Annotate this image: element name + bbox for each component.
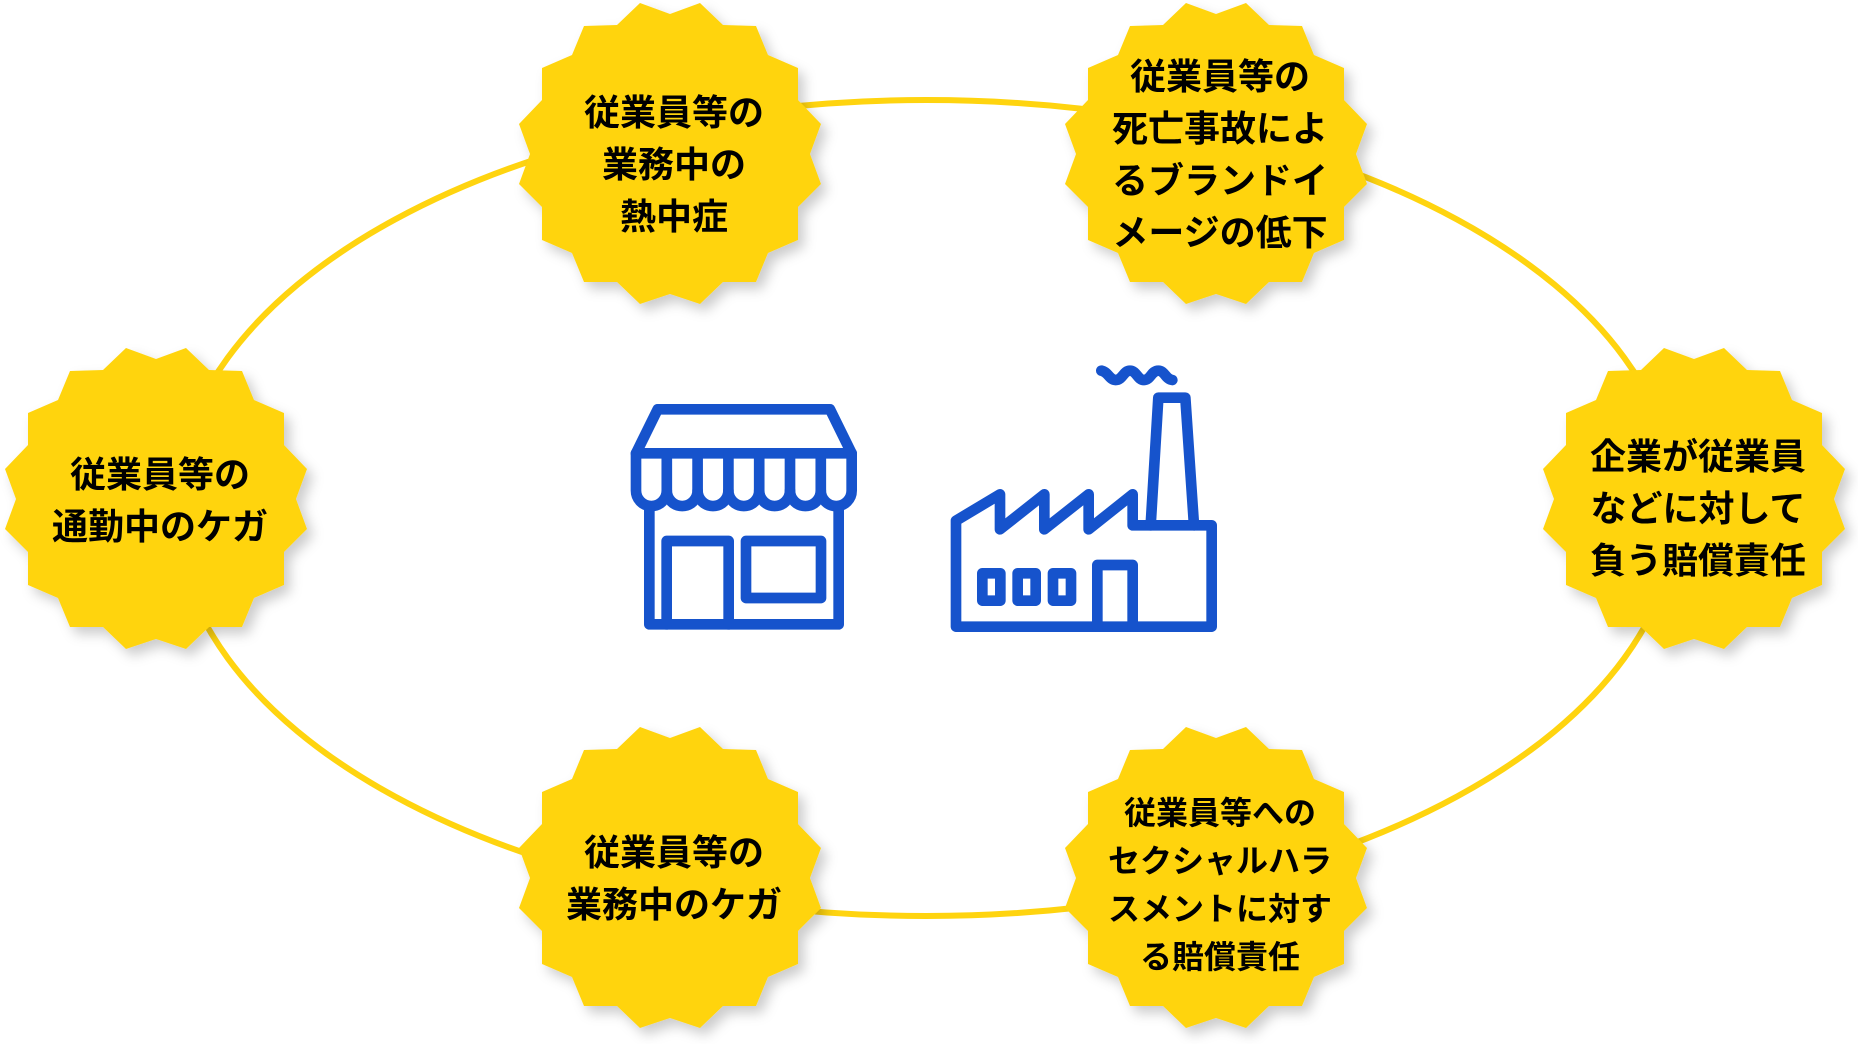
burst: heat stroke during work: 従業員等の: [584, 92, 764, 133]
burst: brand damage from fatal accident: 死亡事故によ: [1112, 108, 1328, 149]
burst: commuting injury: 従業員等の: [70, 454, 250, 495]
burst: brand damage from fatal accident: るブランドイ: [1112, 160, 1328, 201]
burst: brand damage from fatal accident: 従業員等の: [1130, 56, 1310, 97]
burst: employer liability: [1543, 348, 1845, 649]
burst: sexual harassment liability: る賠償責任: [1140, 939, 1300, 975]
burst: sexual harassment liability: [1065, 727, 1367, 1028]
burst: heat stroke during work: [519, 3, 821, 304]
burst: commuting injury: 通勤中のケガ: [52, 506, 268, 547]
burst: commuting injury: [5, 348, 307, 649]
burst: employer liability: などに対して: [1591, 488, 1805, 529]
burst: heat stroke during work: 熱中症: [620, 196, 728, 237]
icon: factory: [956, 371, 1212, 627]
burst: brand damage from fatal accident: [1065, 3, 1367, 304]
burst: sexual harassment liability: 従業員等への: [1124, 795, 1316, 831]
connecting ellipse ring: [175, 100, 1677, 916]
burst: heat stroke during work: 業務中の: [602, 144, 746, 185]
burst: employer liability: 負う賠償責任: [1590, 540, 1806, 581]
burst: injury during work: 従業員等の: [584, 832, 764, 873]
burst: employer liability: 企業が従業員: [1590, 436, 1806, 477]
icon: store: [636, 409, 852, 624]
burst: brand damage from fatal accident: メージの低下: [1112, 212, 1328, 253]
burst: sexual harassment liability: セクシャルハラ: [1108, 843, 1332, 879]
burst: injury during work: [519, 727, 821, 1028]
burst: sexual harassment liability: スメントに対す: [1108, 891, 1332, 927]
burst: injury during work: 業務中のケガ: [566, 884, 782, 925]
